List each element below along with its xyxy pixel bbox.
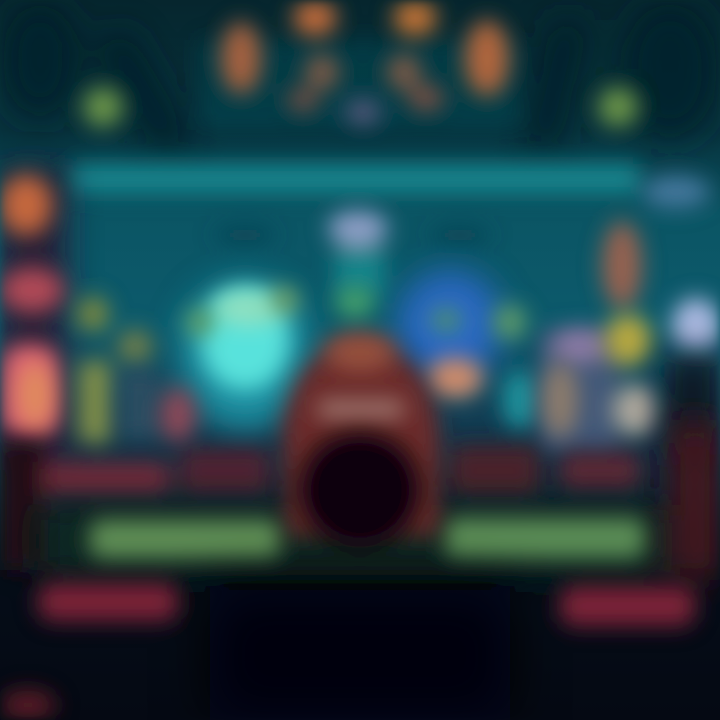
right machines: [540, 221, 720, 465]
ceiling shadows: [0, 0, 720, 150]
ceiling lights: orange: [221, 0, 509, 125]
center green light: [335, 286, 375, 318]
cyan slot machine glow: [179, 279, 311, 431]
blue slot machine glow: [398, 271, 538, 430]
left machines: [0, 170, 196, 470]
center sign: [215, 211, 490, 295]
low row of dark red seats: [0, 440, 640, 570]
teal ceiling band: [70, 40, 640, 194]
left foreground chair: [0, 583, 178, 720]
center seated figure: [282, 332, 440, 548]
green poker table: [40, 505, 680, 575]
right wall lights: [642, 176, 720, 354]
ceiling lights: green: [83, 87, 638, 127]
right foreground chair: [560, 420, 720, 626]
table front shadow: [210, 590, 510, 720]
